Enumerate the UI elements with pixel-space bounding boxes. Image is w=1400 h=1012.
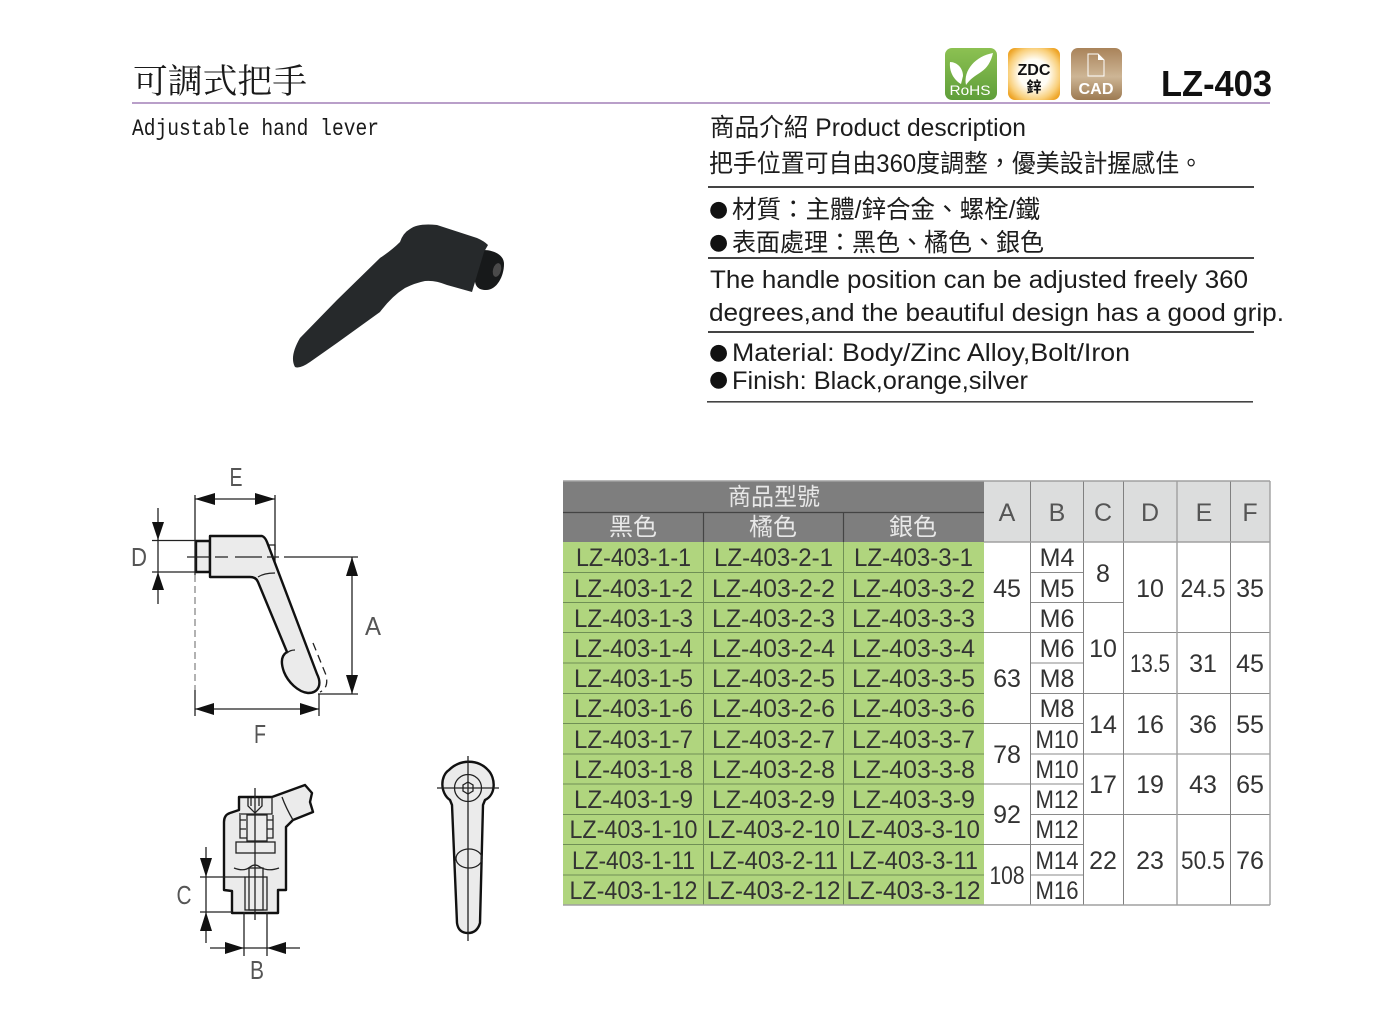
table header: 黑色: [609, 514, 657, 541]
model number grid: LZ-403-2-4: [712, 635, 835, 663]
model number grid: LZ-403-1-8: [574, 756, 693, 784]
dimension values grid: 50.5: [1181, 847, 1225, 875]
description English line 1: The handle position can be adjusted freely 360: [710, 266, 1248, 294]
model number grid: LZ-403-3-8: [852, 756, 975, 784]
header rule: [132, 102, 1270, 104]
dimension values grid: M8: [1040, 665, 1074, 693]
dimension values grid: 36: [1189, 711, 1217, 739]
material English: ●: [709, 340, 728, 365]
model number grid: LZ-403-1-1: [576, 544, 691, 572]
dimension values grid: 45: [993, 575, 1021, 603]
model number grid: LZ-403-3-11: [849, 847, 978, 875]
dimension values grid: 24.5: [1180, 575, 1226, 603]
dimension values grid: 55: [1236, 711, 1264, 739]
dimension values grid: M4: [1040, 544, 1074, 572]
dimension values grid: M14: [1036, 847, 1079, 875]
dimension values grid: 10: [1136, 575, 1164, 603]
dimension values grid: M12: [1036, 786, 1078, 814]
dimension values grid: 92: [993, 801, 1021, 829]
model number grid: LZ-403-1-9: [574, 786, 693, 814]
dimension values grid: M10: [1036, 726, 1078, 754]
icon: ZDC zinc badge: 鋅: [1026, 78, 1042, 96]
title: 可調式把手: [133, 63, 307, 101]
model number grid: LZ-403-2-6: [712, 695, 835, 723]
dimension values grid: 22: [1089, 847, 1117, 875]
dimension values grid: M6: [1040, 605, 1074, 633]
material Chinese: 材質：主體/鋅合金、螺栓/鐵: [732, 196, 1040, 224]
dimension values grid: 45: [1236, 650, 1264, 678]
subtitle: Adjustable hand lever: [132, 116, 379, 142]
finish Chinese: 表面處理：黑色、橘色、銀色: [732, 229, 1044, 257]
table header: 商品型號: [728, 484, 820, 511]
icon: RoHS badge: RoHS: [950, 82, 990, 98]
model number grid: LZ-403-2-2: [712, 575, 835, 603]
table header: 銀色: [889, 514, 937, 541]
dimension F: F: [254, 719, 266, 749]
table header: 橘色: [749, 514, 797, 541]
dimension values grid: 31: [1189, 650, 1217, 678]
drawing: front view: [437, 756, 499, 941]
dimension values grid: 35: [1236, 575, 1264, 603]
dimension values grid: 10: [1089, 635, 1117, 663]
model number grid: LZ-403-1-6: [574, 695, 693, 723]
dimension A: [318, 557, 382, 694]
model number grid: [563, 542, 984, 905]
dimension values grid: M16: [1036, 877, 1078, 905]
finish English: Finish: Black,orange,silver: [732, 367, 1028, 395]
dimension E: [195, 462, 275, 575]
model number grid: LZ-403-1-7: [574, 726, 693, 754]
dimension values grid: M10: [1036, 756, 1078, 784]
icon: RoHS badge: [945, 48, 997, 100]
dimension D: [131, 508, 195, 604]
dimension values grid: 76: [1236, 847, 1264, 875]
model number grid: LZ-403-2-12: [706, 877, 840, 905]
dimension values grid: 8: [1096, 560, 1110, 588]
description Chinese: 把手位置可自由360度調整，優美設計握感佳。: [709, 150, 1203, 178]
dimension B: B: [250, 955, 264, 985]
dimension values grid: 78: [993, 741, 1021, 769]
finish Chinese: ●: [709, 230, 728, 255]
model number grid: LZ-403-3-12: [846, 877, 980, 905]
dimension values grid: M6: [1040, 635, 1074, 663]
dimension D: D: [131, 542, 147, 572]
model number grid: LZ-403-1-11: [572, 847, 695, 875]
table header: A: [999, 499, 1016, 527]
model number grid: LZ-403-3-10: [847, 816, 980, 844]
model number grid: LZ-403-2-10: [707, 816, 840, 844]
material Chinese: ●: [709, 197, 728, 222]
model number grid: LZ-403-2-9: [712, 786, 835, 814]
dimension values grid: 43: [1189, 771, 1217, 799]
dimension values grid: 16: [1136, 711, 1164, 739]
model number grid: LZ-403-2-11: [709, 847, 838, 875]
specification table: [563, 481, 1270, 905]
table header: [563, 481, 1270, 542]
model number: LZ-403: [1161, 63, 1272, 104]
dimension values grid: M12: [1036, 816, 1078, 844]
table header: E: [1196, 499, 1212, 527]
drawing: side view with dimensions: [131, 462, 382, 749]
drawing: section view with dimensions: [176, 785, 313, 985]
finish English: ●: [709, 367, 728, 392]
dimension values grid: [563, 481, 1270, 905]
dimension B: [210, 912, 300, 985]
material English: Material: Body/Zinc Alloy,Bolt/Iron: [732, 339, 1130, 367]
model number grid: LZ-403-1-3: [574, 605, 693, 633]
model number grid: LZ-403-2-7: [712, 726, 835, 754]
panel: product description: [707, 114, 1284, 403]
table header: C: [1094, 499, 1112, 527]
dimension values grid: 14: [1089, 711, 1117, 739]
model number grid: LZ-403-2-5: [712, 665, 835, 693]
dimension values grid: 17: [1089, 771, 1117, 799]
dimension E: E: [230, 462, 242, 492]
description heading: 商品介紹 Product description: [710, 114, 1026, 142]
model number grid: LZ-403-1-4: [574, 635, 693, 663]
dimension C: [176, 847, 245, 943]
dimension values grid: 65: [1236, 771, 1264, 799]
dimension values grid: 19: [1136, 771, 1164, 799]
product photo: black lever: [293, 224, 504, 367]
dimension values grid: M5: [1040, 575, 1074, 603]
model number grid: LZ-403-3-6: [852, 695, 975, 723]
dimension values grid: 108: [990, 862, 1024, 890]
model number grid: LZ-403-1-10: [570, 816, 698, 844]
dimension values grid: 63: [993, 665, 1021, 693]
table header: B: [1049, 499, 1065, 527]
dimension C: C: [176, 880, 192, 910]
model number grid: LZ-403-2-8: [712, 756, 835, 784]
dimension values grid: M8: [1040, 695, 1074, 723]
dimension values grid: 13.5: [1130, 650, 1170, 678]
table header: F: [1242, 499, 1258, 527]
dimension F: [195, 575, 319, 749]
model number grid: LZ-403-1-2: [574, 575, 693, 603]
icon: ZDC zinc badge: ZDC: [1018, 62, 1051, 79]
table header: D: [1141, 499, 1159, 527]
model number grid: LZ-403-3-4: [852, 635, 975, 663]
model number grid: LZ-403-3-3: [852, 605, 975, 633]
model number grid: LZ-403-1-5: [574, 665, 693, 693]
model number grid: LZ-403-2-3: [712, 605, 835, 633]
model number grid: LZ-403-3-5: [852, 665, 975, 693]
model number grid: LZ-403-3-2: [852, 575, 975, 603]
icon: CAD badge: CAD: [1078, 81, 1114, 98]
icon: CAD badge: [1071, 48, 1122, 100]
dimension A: A: [365, 611, 382, 641]
description English line 2: degrees,and the beautiful design has a good grip.: [709, 299, 1284, 327]
dimension values grid: 23: [1136, 847, 1164, 875]
model number grid: LZ-403-3-9: [852, 786, 975, 814]
model number grid: LZ-403-2-1: [714, 544, 833, 572]
model number grid: LZ-403-1-12: [570, 877, 698, 905]
model number grid: LZ-403-3-7: [852, 726, 975, 754]
handle outline: [196, 541, 210, 572]
icon: ZDC zinc badge: [1008, 48, 1060, 100]
model number grid: LZ-403-3-1: [854, 544, 973, 572]
